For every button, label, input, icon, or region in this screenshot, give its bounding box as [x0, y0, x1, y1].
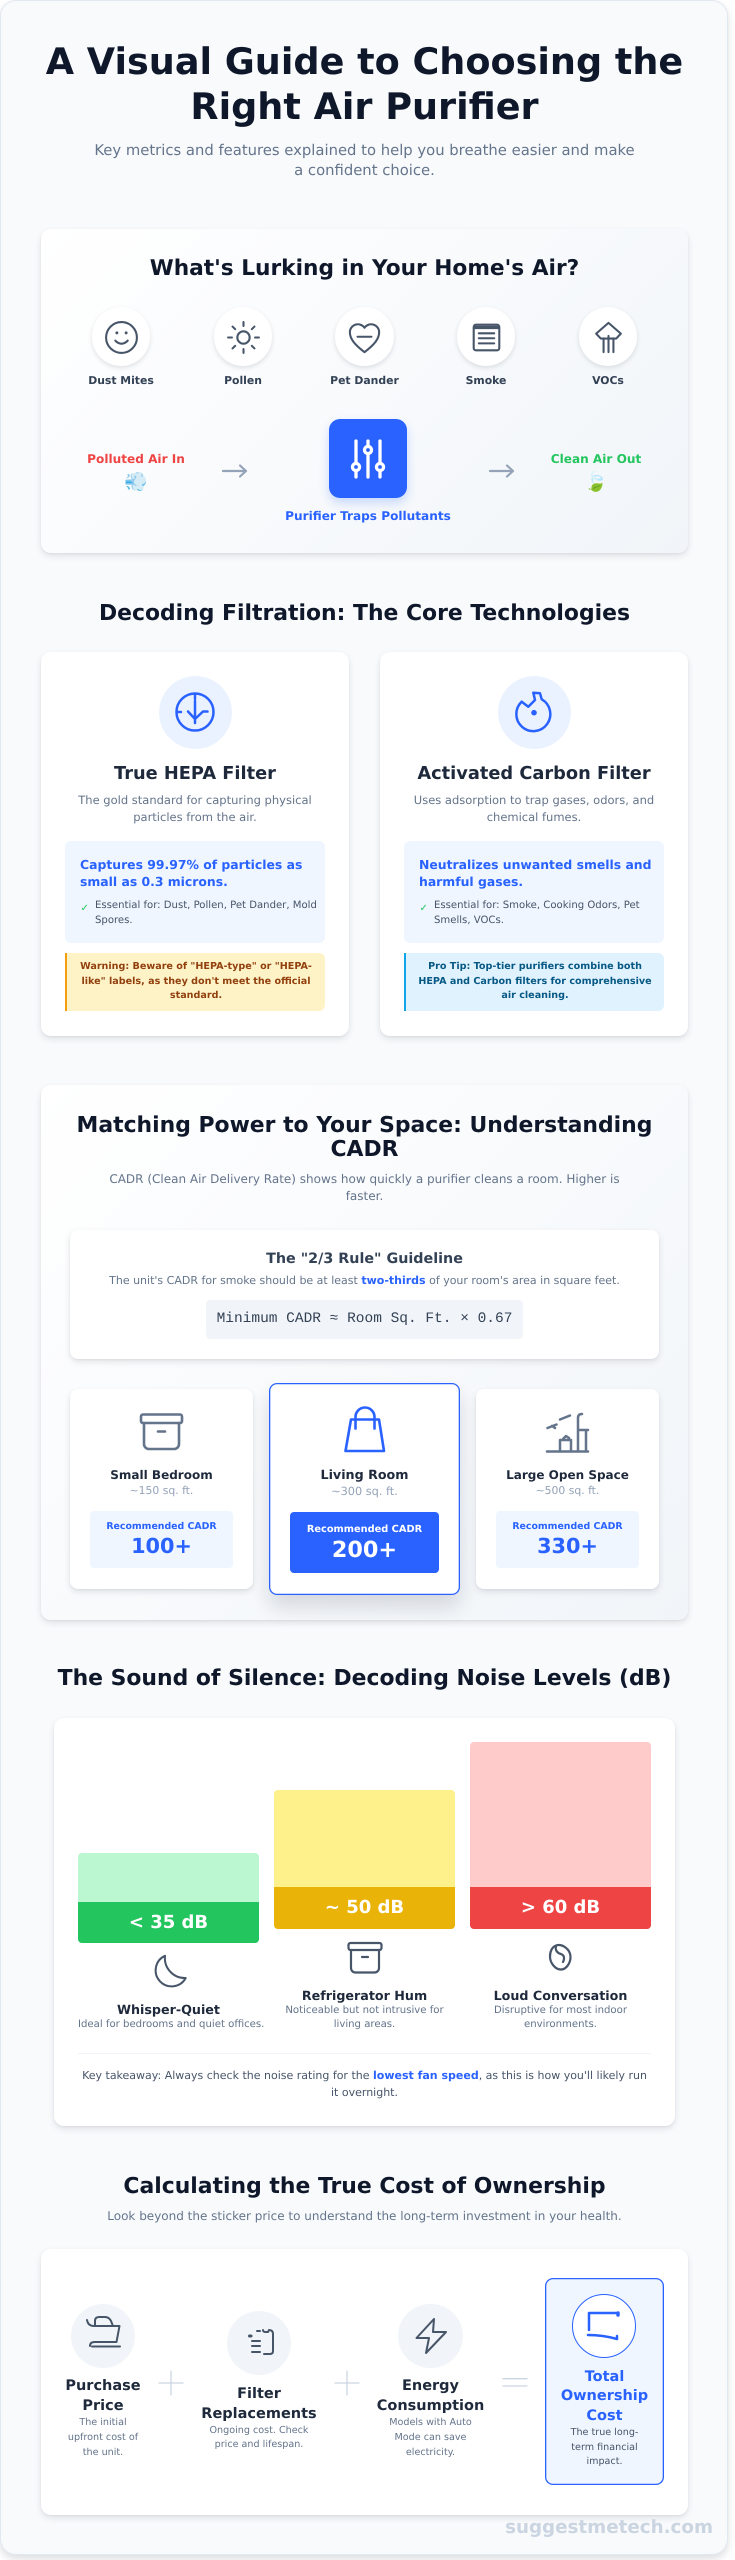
bar: over 60 dB [470, 1742, 651, 1929]
description: refrigerator hum: Noticeable but not intrusive for [285, 2005, 444, 2016]
icon circle: smoke [457, 307, 515, 366]
icon: speech bubble swirl [546, 1942, 574, 1972]
icon: filter dial [175, 692, 215, 732]
icon: sun [227, 321, 260, 354]
description: loud conversation: Disruptive for most indoor [494, 2005, 627, 2016]
key claim: hepa [80, 857, 302, 889]
bar value: about 50 dB: ~ 50 dB [325, 1897, 404, 1918]
description: refrigerator hum [285, 2005, 444, 2030]
intro: true cost: Look beyond the sticker price to understand the long-term investment in your health. [107, 2209, 622, 2223]
description: hepa: The gold standard for capturing physical [78, 793, 312, 807]
intro: cadr: faster. [346, 1188, 383, 1202]
warning text: like" labels, as they don't meet the official [81, 976, 311, 987]
description: hepa: particles from the air. [133, 810, 257, 824]
bar value: under 35 dB: < 35 dB [129, 1912, 208, 1933]
description: purchase price [58, 2416, 148, 2460]
label: recommended cadr: Recommended CADR [512, 1521, 623, 1532]
key takeaway: it overnight. [331, 2086, 398, 2099]
name: whisper-quiet: Whisper-Quiet [117, 2002, 220, 2017]
icon: receipt bracket [585, 2311, 621, 2344]
card: small bedroom [70, 1389, 253, 1589]
icon: document lines [472, 324, 500, 352]
icon: smiley face [105, 321, 138, 354]
name: total ownership cost: Cost [586, 2408, 623, 2424]
essential for list: carbon: Essential for: Smoke, Cooking Odors, Pet [434, 900, 640, 911]
title: Right Air Purifier [190, 85, 539, 128]
icon circle: purchase price [71, 2304, 135, 2368]
heading: noise levels: The Sound of Silence: Decoding Noise Levels (dB) [58, 1666, 671, 1691]
description: filter replacements: Ongoing cost. Check [210, 2425, 308, 2436]
panel: activated carbon filter [380, 652, 688, 1036]
title: A Visual Guide to Choosing the [46, 40, 683, 83]
formula [206, 1300, 523, 1339]
description: energy consumption: Models with Auto [389, 2417, 472, 2428]
description: filter replacements [199, 2424, 319, 2453]
bar value: over 60 dB: > 60 dB [521, 1897, 600, 1918]
icon: clipboard list [248, 2327, 275, 2357]
room area: large open space: ~500 sq. ft. [536, 1484, 599, 1497]
description: purchase price: The initial [79, 2417, 127, 2428]
icon circle: hepa [158, 676, 232, 749]
essential for list: hepa [95, 900, 317, 926]
icon: floor plan furniture [546, 1412, 590, 1453]
description: energy consumption: electricity. [406, 2447, 455, 2458]
rule description: The unit's CADR for smoke should be at least two-thirds of your room's area in square feet. [109, 1274, 620, 1287]
essential for list: hepa: Spores. [95, 915, 133, 926]
warning text: Warning: Beware of "HEPA-type" or "HEPA- [80, 961, 312, 972]
warning text [80, 961, 312, 1001]
icon: sliders [350, 439, 386, 479]
key claim: carbon [419, 857, 652, 889]
noise column: whisper-quiet [78, 1853, 264, 2030]
operator: plus [335, 2371, 359, 2395]
description: loud conversation: environments. [524, 2019, 597, 2030]
icon: archive box [347, 1942, 383, 1974]
label: recommended cadr: Recommended CADR [307, 1524, 422, 1534]
name: filter replacements: Filter [237, 2386, 281, 2402]
card: living room (highlighted) [269, 1383, 460, 1595]
description: purchase price: the unit. [83, 2447, 123, 2458]
panel: true hepa filter [41, 652, 349, 1036]
description: energy consumption: Mode can save [395, 2432, 466, 2443]
subtitle: a confident choice. [294, 162, 435, 178]
label: polluted air in: Polluted Air In [87, 452, 185, 466]
pollutant: vocs [578, 307, 638, 387]
icon circle: carbon [498, 676, 570, 749]
title [46, 40, 683, 128]
description: carbon: chemical fumes. [487, 810, 581, 824]
operator: plus [159, 2371, 183, 2395]
feature box: carbon [404, 841, 664, 943]
room name: small bedroom: Small Bedroom [110, 1468, 213, 1482]
room name: large open space: Large Open Space [506, 1468, 629, 1482]
room area: small bedroom: ~150 sq. ft. [130, 1484, 193, 1497]
label: clean air out: Clean Air Out [551, 452, 641, 466]
pro tip text: air cleaning. [501, 990, 569, 1001]
heading: cadr: CADR [330, 1137, 399, 1162]
icon: archive box [140, 1413, 184, 1450]
label: pet dander: Pet Dander [330, 374, 399, 387]
heading: true hepa filter: True HEPA Filter [114, 763, 276, 784]
description: total ownership cost [545, 2426, 664, 2470]
name: total ownership cost: Ownership [561, 2388, 648, 2404]
check mark: ✓ [80, 903, 89, 914]
check mark: ✓ [420, 903, 428, 914]
description: purchase price: upfront cost of [68, 2432, 138, 2443]
panel: cadr [41, 1085, 688, 1620]
icon: wind emoji: 💨 [124, 471, 148, 493]
name: loud conversation: Loud Conversation [494, 1988, 627, 2003]
description: total ownership cost: The true long- [571, 2427, 638, 2438]
icon: carbon ball [515, 692, 552, 732]
recommended cadr: 330+ [496, 1511, 639, 1568]
cost item: filter replacements [199, 2311, 319, 2456]
pro tip text: HEPA and Carbon filters for comprehensive [418, 976, 652, 987]
description: hepa [78, 793, 312, 824]
key claim: hepa: Captures 99.97% of particles as [80, 857, 302, 872]
cost item: energy consumption [370, 2304, 490, 2462]
panel: 2/3 rule [70, 1230, 659, 1359]
heading: decoding filtration: Decoding Filtration: The Core Technologies [99, 601, 630, 626]
pollutant: pollen [213, 321, 273, 387]
heading: cadr [77, 1113, 652, 1162]
recommended cadr: 200+ [290, 1512, 439, 1573]
label: vocs: VOCs [592, 374, 624, 387]
watermark: suggestmetech.com [505, 2517, 713, 2538]
noise column: refrigerator hum [274, 1790, 455, 2030]
pollutant: dust mites [88, 321, 154, 387]
key claim: carbon: Neutralizes unwanted smells and [419, 857, 652, 872]
icon: shopping bag [344, 1406, 386, 1452]
value: 200+: 200+ [332, 1536, 397, 1562]
value: 100+: 100+ [131, 1534, 192, 1558]
icon: lightning bolt [414, 2317, 448, 2355]
name: total ownership cost [545, 2368, 664, 2426]
icon: heart with minus [348, 323, 380, 354]
recommended cadr: 100+ [90, 1511, 233, 1568]
key claim: hepa: small as 0.3 microns. [80, 874, 228, 889]
intro: cadr: CADR (Clean Air Delivery Rate) shows how quickly a purifier cleans a room. Higher is [109, 1172, 620, 1186]
essential for list: hepa: Essential for: Dust, Pollen, Pet Dander, Mold [95, 900, 317, 911]
name: purchase price: Purchase [65, 2378, 141, 2394]
room name: living room: Living Room [320, 1467, 408, 1482]
description: filter replacements: price and lifespan. [215, 2439, 303, 2450]
name: purchase price [58, 2377, 148, 2416]
name: purchase price: Price [82, 2398, 124, 2414]
flow: purifier [285, 419, 451, 523]
name: energy consumption [370, 2377, 490, 2416]
name: energy consumption: Consumption [377, 2398, 484, 2414]
panel: noise chart [54, 1718, 675, 2126]
description: refrigerator hum: living areas. [334, 2019, 395, 2030]
flow: clean air out [551, 452, 641, 493]
value: 330+: 330+ [537, 1534, 598, 1558]
name: refrigerator hum: Refrigerator Hum [302, 1988, 427, 2003]
icon circle: energy consumption [398, 2304, 463, 2368]
bar: under 35 dB [78, 1853, 259, 1943]
description: whisper-quiet: Ideal for bedrooms and quiet offices. [78, 2019, 264, 2030]
icon circle: pollen [214, 307, 272, 366]
icon circle: vocs [579, 307, 637, 366]
bar value: about 50 dB [274, 1887, 455, 1929]
essential for list: carbon: Smells, VOCs. [434, 915, 504, 926]
heading: 2/3 rule: The "2/3 Rule" Guideline [266, 1251, 463, 1267]
flow: polluted air in [87, 452, 185, 493]
purifier icon box [329, 419, 407, 498]
label: recommended cadr: Recommended CADR [106, 1521, 217, 1532]
icon: leaf emoji: 🍃 [584, 471, 608, 493]
description: carbon: Uses adsorption to trap gases, odors, and [414, 793, 654, 807]
name: filter replacements: Replacements [201, 2406, 317, 2422]
icon circle: dust mites [92, 307, 150, 366]
cost item: purchase price [58, 2304, 148, 2462]
heading: cadr: Matching Power to Your Space: Understanding [77, 1113, 652, 1138]
noise column: loud conversation [470, 1742, 651, 2030]
operator: equals [503, 2376, 527, 2389]
icon circle: filter replacements [227, 2311, 291, 2375]
description: total ownership cost: term financial [571, 2442, 638, 2453]
cost item: total ownership cost [545, 2278, 664, 2485]
label: dust mites: Dust Mites [88, 374, 154, 387]
heading: true cost of ownership: Calculating the True Cost of Ownership [123, 2174, 606, 2199]
pro tip text [418, 961, 652, 1001]
pollutant: smoke [456, 320, 516, 387]
key takeaway [54, 2067, 675, 2101]
key takeaway: Key takeaway: Always check the noise rating for the lowest fan speed, as this is how you'll likely run [82, 2069, 647, 2082]
subtitle: Key metrics and features explained to help you breathe easier and make [94, 142, 635, 159]
name: filter replacements [199, 2385, 319, 2424]
pro tip text: Pro Tip: Top-tier purifiers combine both [428, 961, 642, 972]
icon circle: total cost [572, 2294, 636, 2358]
room area: living room: ~300 sq. ft. [331, 1485, 398, 1498]
icon: purchase tray [85, 2315, 122, 2348]
panel: cost equation [41, 2249, 688, 2515]
formula: Minimum CADR ≈ Room Sq. Ft. × 0.67 [217, 1311, 512, 1327]
label: smoke: Smoke [466, 374, 506, 387]
pro tip callout [404, 953, 664, 1011]
subtitle [94, 142, 635, 178]
name: energy consumption: Energy [402, 2378, 459, 2394]
warning callout [65, 953, 325, 1011]
arrow: polluted to purifier [222, 464, 248, 478]
description: total ownership cost: impact. [586, 2456, 623, 2467]
label: pollen: Pollen [224, 374, 262, 387]
bar value: under 35 dB [78, 1902, 259, 1943]
key claim: carbon: harmful gases. [419, 874, 523, 889]
card: large open space [476, 1389, 659, 1589]
icon circle: pet dander [335, 307, 394, 366]
description: loud conversation [470, 2004, 651, 2033]
icon: diamond with stems [595, 322, 622, 354]
name: total ownership cost: Total [585, 2369, 624, 2385]
bar: about 50 dB [274, 1790, 455, 1929]
feature box: hepa [65, 841, 325, 943]
warning text: standard. [170, 990, 222, 1001]
bar value: over 60 dB [470, 1887, 651, 1929]
heading: activated carbon filter: Activated Carbon Filter [417, 763, 651, 784]
description: energy consumption [370, 2416, 490, 2460]
icon: moon [154, 1954, 187, 1988]
panel: what's lurking in your home's air [41, 229, 688, 553]
pollutant: pet dander [330, 323, 399, 387]
essential for list: carbon [434, 900, 640, 926]
label: purifier traps pollutants: Purifier Traps Pollutants [285, 509, 451, 523]
description: carbon [414, 793, 654, 824]
arrow: purifier to clean air [489, 464, 514, 478]
intro: cadr [109, 1172, 620, 1202]
heading: what's lurking: What's Lurking in Your Home's Air? [150, 256, 579, 281]
